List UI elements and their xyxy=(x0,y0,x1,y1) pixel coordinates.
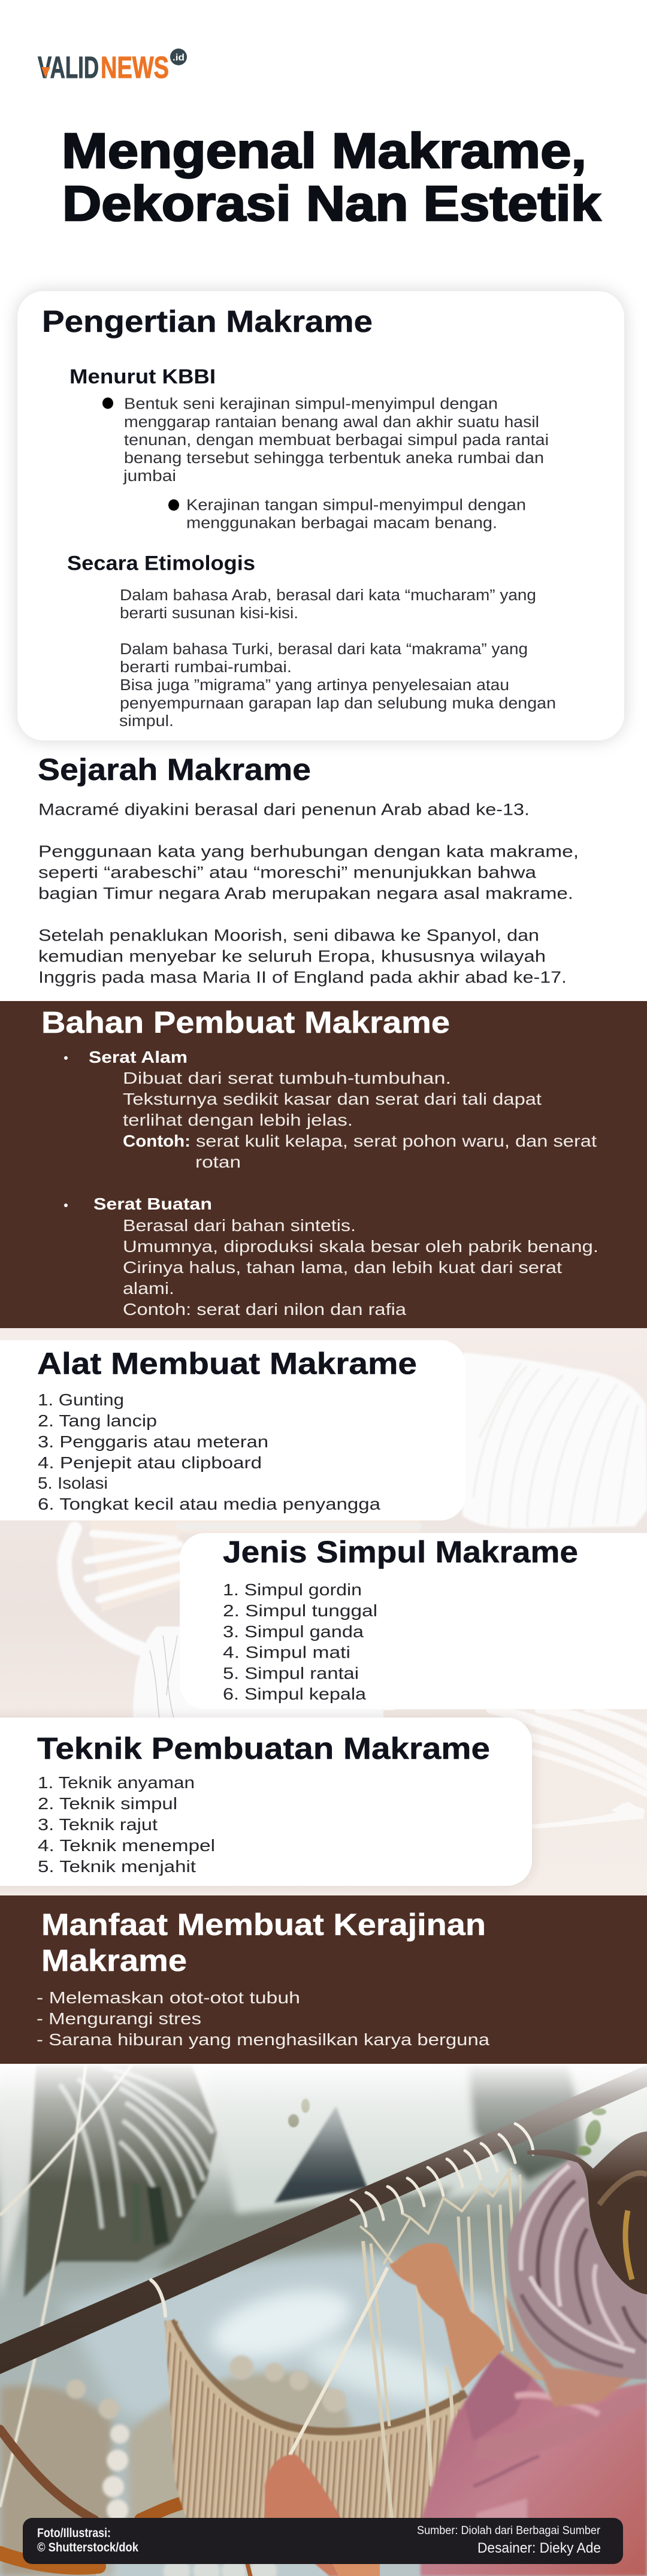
text: history xyxy=(38,800,579,986)
text: KBBI definition 1: tenunan, dengan membuat berbagai simpul pada rantai xyxy=(124,432,549,449)
list: techniques: 1. Teknik anyaman xyxy=(38,1773,195,1792)
background photo: macrame cords on cream xyxy=(0,1328,647,1895)
logo: Validnews.id xyxy=(38,49,187,84)
list: benefits: - Sarana hiburan yang menghasilkan karya berguna xyxy=(37,2030,489,2049)
list: tools: 3. Penggaris atau meteran xyxy=(38,1432,268,1451)
photo: neck and face xyxy=(505,2294,635,2407)
text: KBBI definition 1: benang tersebut sehingga terbentuk aneka rumbai dan xyxy=(124,450,544,467)
text: Serat Buatan description: Umumnya, diproduksi skala besar oleh pabrik benang. xyxy=(123,1237,598,1256)
photo: blue white pillow xyxy=(60,2253,497,2456)
list: techniques: 5. Teknik menjahit xyxy=(38,1857,196,1876)
title: Mengenal Makrame, xyxy=(62,123,586,179)
heading: Sejarah Makrame: Sejarah Makrame xyxy=(38,752,311,787)
section: Sejarah Makrame xyxy=(38,752,579,986)
credit: photo: Foto/Illustrasi: xyxy=(37,2526,111,2540)
text: KBBI definition 1 xyxy=(123,395,549,485)
list: knots xyxy=(223,1580,377,1703)
list: tools: 1. Gunting xyxy=(38,1390,124,1409)
photo: beige pillows with pompoms xyxy=(0,2356,350,2576)
photo: arm and upper hand xyxy=(389,2243,504,2389)
logo wordmark NEWS: NEWS xyxy=(101,50,169,84)
bullet xyxy=(64,1056,68,1060)
text: Serat Alam description: rotan xyxy=(195,1153,241,1171)
credit: source: Sumber: Diolah dari Berbagai Sumber xyxy=(417,2524,601,2537)
cords lower right xyxy=(491,1709,647,1797)
list: tools: 5. Isolasi xyxy=(38,1474,108,1492)
cords band lower centre xyxy=(383,1710,394,1718)
list: benefits: - Mengurangi stres xyxy=(37,2009,201,2028)
list: knots: 6. Simpul kepala xyxy=(223,1685,366,1703)
list: knots: 5. Simpul rantai xyxy=(223,1664,359,1682)
list: benefits: - Melemaskan otot-otot tubuh xyxy=(37,1988,300,2007)
photo: dark tent opening xyxy=(274,2106,367,2203)
photo: lower hand xyxy=(264,2454,341,2576)
bullet xyxy=(168,500,179,510)
heading: Manfaat xyxy=(41,1907,486,1978)
text: etymology: berarti susunan kisi-kisi. xyxy=(120,605,298,622)
heading: Bahan Pembuat Makrame: Bahan Pembuat Makrame xyxy=(41,1005,450,1039)
panel: Jenis Simpul Makrame xyxy=(180,1533,647,1709)
heading: Manfaat: Manfaat Membuat Kerajinan xyxy=(41,1907,486,1942)
text: etymology xyxy=(119,587,556,730)
title xyxy=(62,123,601,231)
list: benefits xyxy=(37,1988,489,2049)
list: tools: 6. Tongkat kecil atau media penyangga xyxy=(38,1495,380,1513)
photo: white ropes left xyxy=(0,2065,132,2507)
text: history: Inggris pada masa Maria II of England pada akhir abad ke-17. xyxy=(38,968,567,986)
text: Serat Buatan description: Cirinya halus, tahan lama, dan lebih kuat dari serat xyxy=(123,1258,562,1277)
photo: held cord xyxy=(290,2267,388,2455)
title: Dekorasi Nan Estetik xyxy=(62,176,601,231)
text: KBBI definition 2: Kerajinan tangan simpul-menyimpul dengan xyxy=(186,497,526,514)
list: techniques: 4. Teknik menempel xyxy=(38,1836,215,1855)
list: techniques: 2. Teknik simpul xyxy=(38,1794,177,1813)
footer credit bar xyxy=(23,2518,623,2564)
heading: Jenis Simpul Makrame: Jenis Simpul Makrame xyxy=(223,1535,578,1569)
panel: Teknik Pembuatan Makrame xyxy=(0,1718,532,1886)
bullet xyxy=(64,1204,68,1207)
logo accent tick xyxy=(41,67,50,78)
photo: hair xyxy=(527,2131,647,2294)
photo: palm leaf xyxy=(24,2065,217,2297)
logo wordmark VALID: VALID xyxy=(38,50,99,84)
text: KBBI definition 1: Bentuk seni kerajinan simpul-menyimpul dengan xyxy=(124,395,498,412)
macrame hoop and cords xyxy=(65,1520,419,1649)
text: etymology: Dalam bahasa Turki, berasal dari kata “makrama” yang xyxy=(120,641,528,658)
text: KBBI definition 2: menggunakan berbagai macam benang. xyxy=(186,515,497,532)
text: history: Macramé diyakini berasal dari penenun Arab abad ke-13. xyxy=(38,800,530,818)
list: techniques: 3. Teknik rajut xyxy=(38,1815,158,1834)
list: knots: 3. Simpul ganda xyxy=(223,1622,364,1641)
text: Serat Alam description: terlihat dengan lebih jelas. xyxy=(123,1111,353,1129)
photo: ivy leaves xyxy=(288,2099,606,2155)
photo: tent and curtains xyxy=(0,2065,647,2300)
panel: Pengertian Makrame xyxy=(17,291,624,740)
text: etymology: simpul. xyxy=(119,713,174,730)
text: history: Penggunaan kata yang berhubungan dengan kata makrame, xyxy=(38,842,579,860)
text: history: kemudian menyebar ke seluruh Eropa, khususnya wilayah xyxy=(38,947,546,966)
list: tools: 2. Tang lancip xyxy=(38,1411,157,1430)
frayed cord xyxy=(530,1802,645,1829)
subheading: Serat Alam: Serat Alam xyxy=(89,1048,188,1066)
list: techniques xyxy=(38,1773,215,1876)
credit: photo: © Shutterstock/dok xyxy=(37,2541,138,2554)
text: Serat Alam description: Contoh: xyxy=(123,1132,191,1150)
list: knots: 4. Simpul mati xyxy=(223,1643,350,1662)
yarn spool top right xyxy=(462,1353,647,1529)
heading: Alat Membuat Makrame: Alat Membuat Makrame xyxy=(37,1347,417,1380)
photo: woman making macrame xyxy=(0,2064,647,2576)
text: Serat Alam description xyxy=(123,1069,597,1171)
text: etymology: Dalam bahasa Arab, berasal dari kata “mucharam” yang xyxy=(120,587,536,604)
subheading: Menurut KBBI: Menurut KBBI xyxy=(69,365,216,388)
text: Serat Alam description: serat kulit kelapa, serat pohon waru, dan serat xyxy=(196,1132,597,1150)
heading: Pengertian Makrame: Pengertian Makrame xyxy=(42,304,373,338)
text: Serat Buatan description xyxy=(123,1216,598,1319)
photo: lower arm xyxy=(329,2558,380,2576)
text: history: seperti “arabeschi” atau “moreschi” menunjukkan bahwa xyxy=(38,863,536,882)
text: Serat Alam description: Teksturnya sedikit kasar dan serat dari tali dapat xyxy=(123,1090,542,1108)
text: history: bagian Timur negara Arab merupakan negara asal makrame. xyxy=(38,884,573,902)
text: etymology: penyempurnaan garapan lap dan selubung muka dengan xyxy=(120,695,556,712)
panel: Alat Membuat Makrame xyxy=(0,1340,465,1520)
credit: designer: Desainer: Dieky Ade xyxy=(477,2540,601,2556)
credit: photo xyxy=(37,2526,138,2554)
text: history: Setelah penaklukan Moorish, seni dibawa ke Spanyol, dan xyxy=(38,926,539,944)
photo: knotted net and hanging cords xyxy=(360,2168,521,2519)
subheading: Secara Etimologis: Secara Etimologis xyxy=(67,552,255,575)
logo .id badge xyxy=(170,49,187,65)
heading: Manfaat: Makrame xyxy=(41,1943,187,1978)
photo: robe xyxy=(421,2351,647,2576)
bullet xyxy=(102,398,113,409)
photo: brown and orange ropes xyxy=(0,2429,250,2576)
photo: fringe macrame xyxy=(165,2321,466,2525)
text: KBBI definition 1: menggarap rantaian benang awal dan akhir suatu hasil xyxy=(124,414,539,431)
text: etymology: berarti rumbai-rumbai. xyxy=(120,659,292,676)
list: tools xyxy=(38,1390,380,1513)
tassel lower centre xyxy=(133,1626,395,1719)
photo: turban xyxy=(507,2154,647,2380)
photo: fringe behind arm xyxy=(503,2348,545,2381)
list: knots: 1. Simpul gordin xyxy=(223,1580,362,1599)
list: knots: 2. Simpul tunggal xyxy=(223,1601,377,1620)
text: KBBI definition 1: jumbai xyxy=(123,468,176,485)
text: Serat Buatan description: alami. xyxy=(123,1279,174,1298)
list: tools: 4. Penjepit atau clipboard xyxy=(38,1453,262,1472)
text: KBBI definition 2 xyxy=(186,497,526,532)
photo: branch xyxy=(0,2065,647,2374)
heading: Teknik Pembuatan Makrame: Teknik Pembuatan Makrame xyxy=(37,1731,490,1765)
photo: cord loops on branch xyxy=(151,2124,533,2316)
subheading: Serat Buatan: Serat Buatan xyxy=(93,1195,212,1213)
logo .id badge: .id xyxy=(173,53,185,63)
photo: top white fade xyxy=(0,2064,647,2184)
text: Serat Buatan description: Berasal dari bahan sintetis. xyxy=(123,1216,356,1235)
text: Serat Buatan description: Contoh: serat dari nilon dan rafia xyxy=(123,1300,406,1319)
text: Serat Alam description: Dibuat dari serat tumbuh-tumbuhan. xyxy=(123,1069,451,1087)
panel: Manfaat Membuat Kerajinan Makrame xyxy=(0,1895,647,2064)
panel: Bahan Pembuat Makrame xyxy=(0,1001,647,1328)
text: etymology: Bisa juga ”migrama” yang artinya penyelesaian atau xyxy=(120,677,509,694)
